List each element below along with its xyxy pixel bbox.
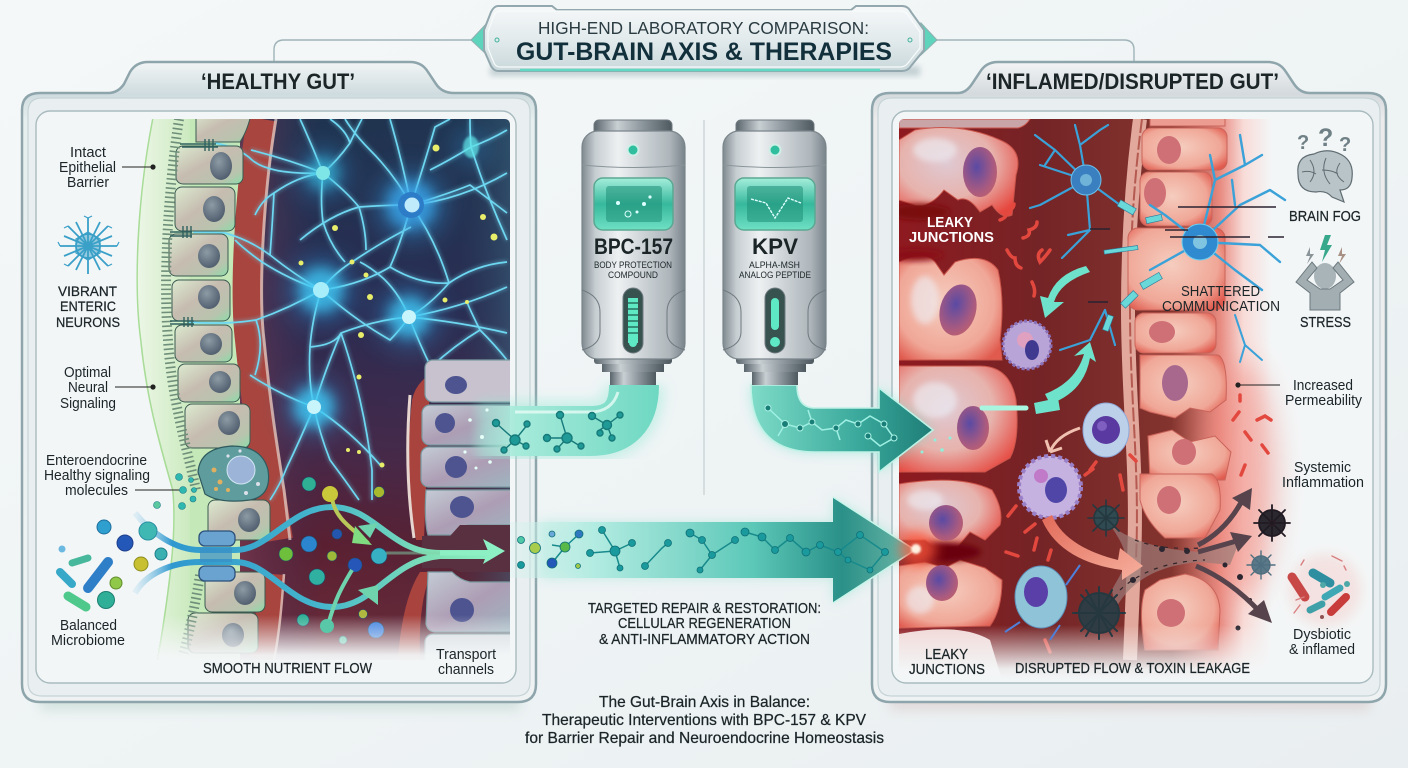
text block: summary caption: Therapeutic Interventions with BPC-157 & KPV: [542, 712, 866, 729]
red bacteria debris: [1000, 204, 1271, 652]
yellow synapse sparks: [298, 144, 498, 468]
capsule description: ANALOG PEPTIDE: [739, 270, 811, 281]
heading: healthy gut: ‘HEALTHY GUT’: [201, 69, 355, 94]
pink inflammation glow: [1204, 360, 1276, 600]
molecules in pipe: [492, 412, 623, 453]
annotation: increased permeability: [1235, 378, 1363, 409]
panel frame with tab: [872, 62, 1386, 702]
capsule indicator light: [628, 144, 638, 156]
icon: brain with question marks: ?: [1339, 134, 1351, 156]
annotation: vibrant enteric neurons: [56, 283, 120, 330]
sparkles at pipe exit: [463, 408, 492, 470]
annotation: leaky junctions upper: JUNCTIONS: [909, 230, 994, 246]
capsule body: [582, 131, 685, 359]
text block: summary caption: The Gut-Brain Axis in Balance:: [599, 694, 810, 711]
label: smooth nutrient flow: SMOOTH NUTRIENT FLOW: [203, 660, 373, 677]
annotation: dysbiotic and inflamed: & inflamed: [1289, 642, 1355, 658]
arrow: pink inflammatory arrow: [1042, 515, 1143, 580]
capsule nozzle: [736, 352, 814, 385]
cell mottling: [906, 138, 957, 614]
capsule level gauge: [623, 288, 643, 353]
divider between capsules: [703, 120, 705, 495]
text block: summary caption: [525, 694, 884, 747]
neuron cluster: shattered neurons: [1030, 125, 1285, 362]
annotation: shattered communication: SHATTERED: [1181, 284, 1260, 300]
annotation: vibrant enteric neurons: VIBRANT: [58, 283, 117, 299]
annotation: leaky junctions lower: [909, 647, 985, 678]
annotation: balanced microbiome: [51, 618, 125, 649]
capsule body: [723, 131, 826, 359]
capsule description: [594, 260, 672, 281]
annotation: enteroendocrine signaling molecules: [44, 453, 180, 499]
virus: large dark: [1073, 587, 1125, 639]
capsule: KPV: [723, 120, 826, 385]
neuron bodies: [294, 136, 479, 427]
nutrient particles in lumen: [279, 477, 387, 644]
annotation: leaky junctions upper: LEAKY: [927, 215, 973, 231]
immune cell: spiky purple: [1003, 321, 1051, 369]
arrow: targeted repair: [510, 497, 936, 603]
neuron blooms: [288, 133, 485, 433]
capsule level gauge: [765, 288, 785, 353]
arrows: cyan repair arrows: [1040, 266, 1096, 404]
annotation: enteroendocrine signaling molecules: Healthy signaling: [44, 468, 150, 484]
annotation: brain fog: BRAIN FOG: [1289, 209, 1361, 225]
flow & toxin leakage channel: [1112, 528, 1236, 604]
annotation: vibrant enteric neurons: ENTERIC: [60, 298, 116, 314]
heading: inflamed gut: ‘INFLAMED/DISRUPTED GUT’: [986, 69, 1279, 94]
immune cell: purple with pale ring: [1083, 403, 1129, 457]
big cell nuclei: [926, 147, 997, 601]
immune cells: [1003, 321, 1129, 640]
label: transport channels: Transport: [436, 647, 496, 663]
virus: grey-blue: [1247, 551, 1275, 579]
virus particles: [1073, 500, 1290, 639]
annotation: enteroendocrine signaling molecules: molecules: [65, 483, 128, 499]
annotation: leaky junctions lower: JUNCTIONS: [909, 662, 985, 678]
arrow: BPC-157 pipe: [463, 385, 634, 470]
tight junction clamps: [170, 139, 218, 327]
panel frame with tab: [22, 62, 536, 702]
capsule description: COMPOUND: [608, 270, 658, 281]
capsule name: BPC-157: [594, 234, 673, 259]
dark neural background: [240, 119, 515, 664]
text block: summary caption: for Barrier Repair and Neuroendocrine Homeostasis: [525, 730, 884, 747]
annotation: shattered communication: COMMUNICATION: [1162, 299, 1280, 315]
fade bottom of tissue: [157, 616, 510, 660]
annotation: intact epithelial barrier: Intact: [70, 145, 106, 161]
arrows: dark toxin arrows: [1196, 488, 1272, 623]
capsule indicator light: [770, 144, 780, 156]
capsule description: [739, 260, 811, 281]
epithelial cells: [169, 110, 270, 653]
text block: targeted repair: [588, 600, 821, 648]
big left cells: [899, 119, 1030, 680]
icon: brain with question marks: [1297, 124, 1352, 202]
enteroendocrine cell: [198, 446, 269, 501]
icon: balanced microbiome: [58, 520, 167, 608]
annotation: optimal neural signaling: Neural: [68, 380, 108, 396]
annotation: optimal neural signaling: Signaling: [60, 396, 116, 412]
capsule cap: [736, 120, 814, 144]
capsule screen: [735, 178, 815, 230]
annotation: enteroendocrine signaling molecules: Enteroendocrine: [46, 453, 147, 469]
text block: targeted repair: & ANTI-INFLAMMATORY ACTION: [599, 631, 810, 648]
annotation: balanced microbiome: Balanced: [60, 618, 117, 634]
right cells: [1128, 108, 1231, 650]
capsule description: ALPHA-MSH: [749, 260, 800, 271]
annotation: systemic inflammation: Inflammation: [1282, 475, 1364, 491]
label: disrupted flow and toxin leakage: DISRUPTED FLOW & TOXIN LEAKAGE: [1015, 660, 1250, 677]
connector lines from title to panels: [274, 40, 1134, 62]
annotation: shattered communication: [1162, 284, 1280, 315]
label: transport channels: [436, 647, 496, 678]
icon: brain with question marks: ?: [1318, 124, 1333, 152]
annotation: dysbiotic and inflamed: Dysbiotic: [1293, 627, 1351, 643]
annotation: stress: STRESS: [1300, 315, 1351, 331]
capsule cap: [594, 120, 672, 144]
icon: brain with question marks: ?: [1297, 132, 1309, 154]
capsule nozzle: [594, 352, 672, 385]
capsule: BPC-157: [582, 120, 685, 385]
annotation: systemic inflammation: [1282, 460, 1364, 491]
title line 1: HIGH-END LABORATORY COMPARISON:: [538, 18, 869, 38]
annotation: increased permeability: Increased: [1293, 378, 1353, 394]
panel: inflamed gut: [872, 62, 1386, 710]
fade bottom of tissue: [899, 627, 1264, 680]
annotation: intact epithelial barrier: Barrier: [67, 175, 109, 191]
immune cell: blue: [1005, 565, 1080, 640]
text block: targeted repair: CELLULAR REGENERATION: [618, 615, 791, 632]
arrow: small pale arrow: [1046, 428, 1080, 452]
annotation: vibrant enteric neurons: NEURONS: [56, 314, 120, 330]
annotation: balanced microbiome: Microbiome: [51, 633, 125, 649]
annotation: leaky junctions upper: [909, 215, 994, 246]
capsule name: KPV: [752, 234, 798, 259]
annotation: optimal neural signaling: [60, 365, 156, 412]
annotation: optimal neural signaling: Optimal: [64, 365, 111, 381]
capsule description: BODY PROTECTION: [594, 260, 672, 271]
title line 2: GUT-BRAIN AXIS & THERAPIES: [516, 38, 892, 66]
panel: healthy gut: [22, 62, 536, 710]
teal repair sparkles: [920, 436, 952, 454]
muscle strip: [1128, 119, 1140, 660]
virus: black: [1254, 505, 1290, 541]
microvilli brush border: [166, 119, 200, 656]
junction glow: [889, 542, 981, 562]
muscle band: [248, 119, 290, 660]
capsule screen: [594, 178, 673, 230]
icon: enteric neuron star: [58, 216, 119, 274]
icon: dysbiotic bacteria: [1289, 554, 1361, 626]
label: transport channels: channels: [438, 662, 494, 678]
annotation: intact epithelial barrier: Epithelial: [59, 160, 116, 176]
tissue illustration: [899, 119, 1292, 672]
virus: teal: [1088, 500, 1124, 536]
annotation: intact epithelial barrier: [59, 145, 156, 191]
neural network: [189, 119, 507, 500]
text block: targeted repair: TARGETED REPAIR & RESTORATION:: [588, 600, 821, 617]
molecule chain in arrow: [552, 530, 885, 570]
molecules in pipe: [768, 408, 894, 446]
title banner: [471, 6, 937, 76]
arrow: glowing cyan dash: [982, 398, 1060, 414]
immune cell: large spiky: [1019, 456, 1081, 518]
annotation: leaky junctions lower: LEAKY: [925, 647, 968, 663]
tissue illustration: [130, 110, 525, 674]
flow arrowheads: [139, 486, 505, 633]
annotation: systemic inflammation: Systemic: [1294, 460, 1351, 476]
nutrient flow channels: [135, 498, 492, 625]
arrow: KPV pipe with arrowhead: [751, 385, 933, 472]
annotation: dysbiotic and inflamed: [1289, 627, 1355, 658]
signaling molecule dots: [154, 474, 196, 510]
red burst at arrow tip: [900, 531, 936, 567]
annotation: increased permeability: Permeability: [1285, 393, 1363, 409]
right tissue column: [399, 359, 510, 655]
icon: stressed person with lightning: [1296, 235, 1354, 310]
